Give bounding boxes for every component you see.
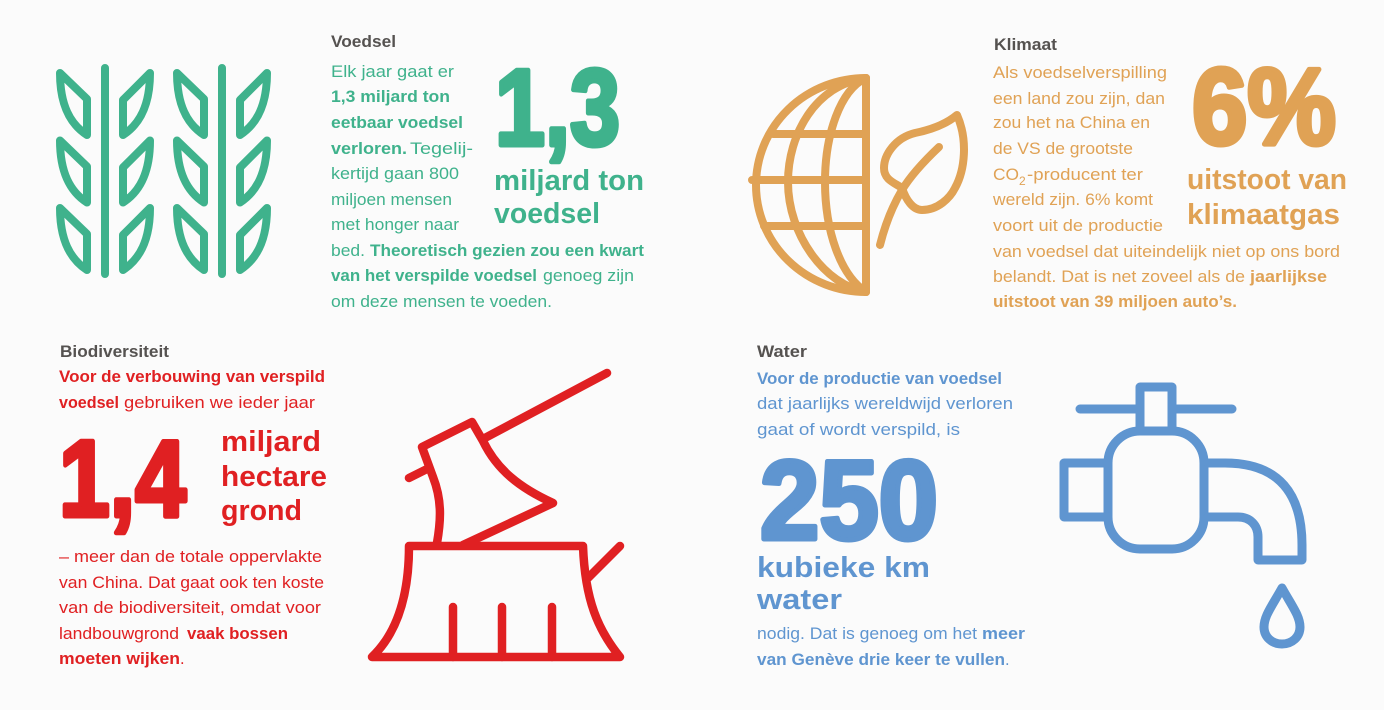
intro text: biodiversiteit: Voor de verbouwing van verspild: [59, 368, 325, 386]
text block: biodiversiteit: .: [180, 650, 185, 668]
big number: 250: 250: [760, 438, 938, 563]
text block: klimaat: 2: [1019, 174, 1026, 188]
label: miljard hectare grond: miljard: [221, 426, 321, 458]
big number: 1,4: 1,4: [59, 418, 186, 540]
heading: klimaat: Klimaat: [994, 36, 1058, 54]
label: miljard hectare grond: grond: [221, 495, 302, 527]
text block: voedsel: met honger naar: [331, 216, 460, 234]
label: miljard ton voedsel: voedsel: [494, 198, 600, 230]
intro text: biodiversiteit: [59, 368, 325, 412]
text block: water: .: [1005, 651, 1010, 669]
text block: voedsel: eetbaar voedsel: [331, 114, 463, 132]
text block: klimaat: [992, 64, 1340, 311]
intro text: water: Voor de productie van voedsel: [757, 370, 1002, 388]
big number: 1,3: 1,3: [495, 47, 620, 169]
label: uitstoot van klimaatgas: [1187, 164, 1347, 231]
text block: voedsel: verloren.: [331, 140, 407, 158]
text block: voedsel: Theoretisch gezien zou een kwart: [370, 242, 645, 260]
text block: voedsel: genoeg zijn: [543, 267, 634, 285]
text block: water: van Genève drie keer te vullen: [757, 651, 1005, 669]
label: miljard ton voedsel: miljard ton: [494, 165, 644, 197]
text block: klimaat: van voedsel dat uiteindelijk niet op ons bord: [993, 243, 1340, 261]
icon: wheat: [60, 68, 267, 274]
text block: voedsel: [331, 63, 645, 311]
intro text: water: [757, 370, 1013, 439]
text block: voedsel: om deze mensen te voeden.: [331, 293, 552, 311]
text block: klimaat: jaarlijkse: [1249, 268, 1327, 286]
panel: water: [756, 343, 1026, 669]
big number: 6%: 6%: [1192, 46, 1336, 168]
text block: klimaat: Als voedselverspilling: [993, 64, 1167, 82]
label: kubieke km water: [756, 552, 930, 616]
heading: voedsel: Voedsel: [331, 33, 396, 51]
text block: klimaat: CO: [993, 166, 1019, 184]
heading: water: Water: [757, 343, 808, 361]
text block: biodiversiteit: vaak bossen: [187, 625, 288, 643]
text block: voedsel: bed.: [331, 242, 365, 260]
text block: water: [757, 625, 1026, 669]
text block: voedsel: Tegelij-: [410, 140, 473, 158]
text block: biodiversiteit: landbouwgrond: [59, 625, 179, 643]
label: kubieke km water: kubieke km: [757, 552, 930, 584]
text block: water: meer: [982, 625, 1026, 643]
intro text: biodiversiteit: gebruiken we ieder jaar: [124, 394, 316, 412]
text block: voedsel: 1,3 miljard ton: [331, 88, 450, 106]
heading: biodiversiteit: Biodiversiteit: [60, 343, 170, 361]
intro text: water: gaat of wordt verspild, is: [757, 421, 960, 439]
text block: klimaat: -producent ter: [1027, 166, 1144, 184]
text block: biodiversiteit: van de biodiversiteit, omdat voor: [59, 599, 322, 617]
text block: voedsel: van het verspilde voedsel: [331, 267, 537, 285]
text block: biodiversiteit: moeten wijken: [59, 650, 180, 668]
text block: biodiversiteit: – meer dan de totale oppervlakte: [59, 548, 322, 566]
label: kubieke km water: water: [756, 584, 842, 616]
intro text: water: dat jaarlijks wereldwijd verloren: [757, 395, 1013, 413]
intro text: biodiversiteit: voedsel: [59, 394, 119, 412]
label: miljard hectare grond: hectare: [221, 461, 327, 493]
icon: water tap with drop: [1064, 387, 1302, 644]
text block: klimaat: de VS de grootste: [993, 140, 1133, 158]
panel: klimaat: [992, 36, 1347, 311]
text block: klimaat: wereld zijn. 6% komt: [992, 191, 1153, 209]
text block: water: nodig. Dat is genoeg om het: [757, 625, 977, 643]
panel: biodiversiteit: [59, 343, 327, 668]
text block: biodiversiteit: [59, 548, 324, 668]
label: miljard ton voedsel: [494, 165, 644, 230]
label: uitstoot van klimaatgas: uitstoot van: [1187, 164, 1347, 196]
text block: biodiversiteit: van China. Dat gaat ook ten koste: [59, 574, 324, 592]
text block: voedsel: miljoen mensen: [331, 191, 452, 209]
icon: globe with leaf: [752, 78, 964, 292]
icon: axe in tree stump: [372, 373, 620, 657]
label: miljard hectare grond: [221, 426, 327, 527]
text block: klimaat: voort uit de productie: [993, 217, 1163, 235]
panel: voedsel: [331, 33, 645, 311]
label: uitstoot van klimaatgas: klimaatgas: [1187, 199, 1340, 231]
text block: klimaat: zou het na China en: [993, 114, 1150, 132]
text block: klimaat: een land zou zijn, dan: [993, 90, 1165, 108]
text block: voedsel: Elk jaar gaat er: [331, 63, 455, 81]
text block: klimaat: belandt. Dat is net zoveel als de: [993, 268, 1245, 286]
text block: klimaat: uitstoot van 39 miljoen auto’s.: [993, 293, 1237, 311]
text block: voedsel: kertijd gaan 800: [331, 165, 459, 183]
